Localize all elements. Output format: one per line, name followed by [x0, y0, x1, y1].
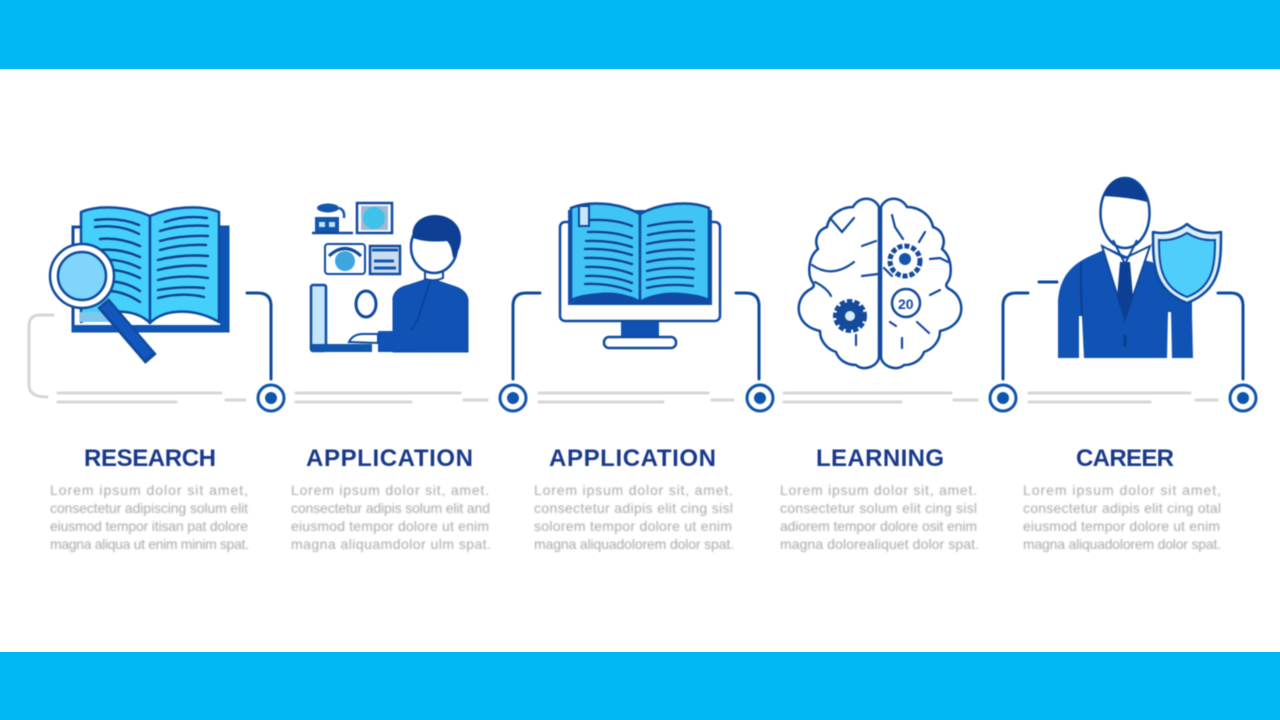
collar and tie [1102, 246, 1150, 320]
icon: open book with magnifier [50, 207, 229, 359]
gear top [890, 246, 920, 276]
timeline node 4 [990, 385, 1016, 411]
text block: learning: magna dolorealiquet dolor spat. [780, 536, 979, 552]
timeline connectors [29, 293, 1243, 397]
heading: application: APPLICATION [306, 445, 473, 472]
heading: research: RESEARCH [84, 445, 216, 472]
text block: application: magna aliquamdolor ulm spat. [291, 536, 491, 552]
icon: business person with shield [1039, 178, 1221, 358]
arm and hand [378, 331, 422, 352]
text block: research: magna aliqua ut enim minim spat. [50, 536, 249, 552]
timeline node 2 [500, 385, 526, 411]
heading: application second: APPLICATION [549, 445, 716, 472]
text block: learning: consectetur solum elit cing sisl [780, 500, 977, 516]
text block: application second: magna aliquadolorem dolor spat. [534, 536, 734, 552]
heading: career: CAREER [1076, 445, 1174, 472]
gear lower [836, 302, 864, 330]
icon: brain with gears: 20 [898, 296, 914, 312]
text block: application second: Lorem ipsum dolor sit, amet. [534, 482, 733, 498]
shield [1153, 224, 1221, 303]
gear center [892, 289, 920, 317]
text block: learning: Lorem ipsum dolor sit, amet. [780, 482, 977, 498]
text block: application second: solorem tempor dolore ut enim [534, 518, 732, 534]
text block: research [50, 482, 249, 552]
head [1100, 178, 1150, 248]
laptop [311, 285, 326, 351]
text block: application: eiusmod tempor dolore ut enim [291, 518, 489, 534]
text block: research: eiusmod tempor itisan pat dolore [50, 518, 248, 534]
text block: research: consectetur adipiscing solum elit [50, 500, 248, 516]
monitor [560, 222, 720, 321]
small device icons [312, 203, 400, 274]
icon: person at laptop [311, 203, 468, 352]
text block: application [291, 482, 491, 552]
timeline node 3 [747, 385, 773, 411]
text block: career: magna aliquadolorem dolor spat. [1023, 536, 1221, 552]
torso [393, 279, 468, 352]
text block: career [1023, 482, 1221, 552]
suit [1058, 248, 1193, 358]
mouse [356, 291, 376, 317]
heading: learning: LEARNING [816, 445, 944, 472]
timeline gray bars [58, 393, 1217, 402]
text block: application: consectetur adipis solum elit and [291, 500, 490, 516]
text block: application: Lorem ipsum dolor sit, amet. [291, 482, 489, 498]
text block: learning: adiorem tempor dolore osit enim [780, 518, 977, 534]
text block: application second: consectetur adipis elit cing sisl [534, 500, 733, 516]
timeline node 5 [1230, 385, 1256, 411]
icon: book on monitor [560, 203, 720, 348]
text block: application second [534, 482, 734, 552]
bottom banner [0, 652, 1280, 720]
text block: career: consectetur adipis elit cing otal [1023, 500, 1221, 516]
top banner [0, 0, 1280, 69]
text block: research: Lorem ipsum dolor sit amet, [50, 482, 248, 498]
text block: learning [780, 482, 979, 552]
icon: brain with gears [799, 199, 961, 368]
text block: career: eiusmod tempor dolore ut enim [1023, 518, 1220, 534]
head [425, 268, 443, 280]
text block: career: Lorem ipsum dolor sit amet, [1023, 482, 1221, 498]
timeline node 1 [258, 385, 284, 411]
book [568, 210, 712, 305]
infographic content [29, 178, 1256, 552]
